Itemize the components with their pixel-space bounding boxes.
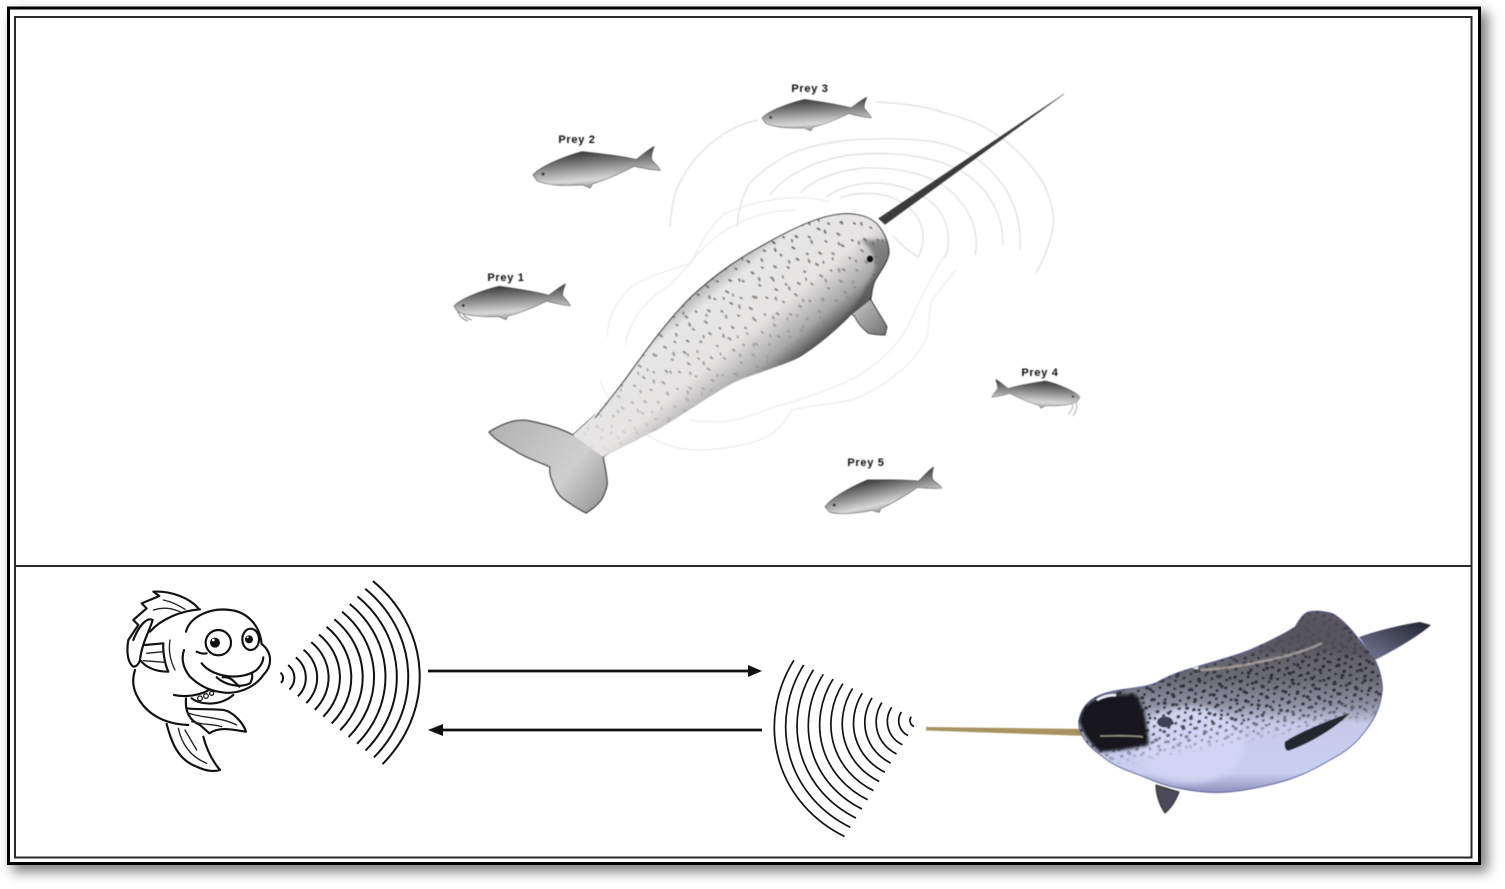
narwhal body bbox=[572, 212, 890, 458]
icon: cartoon fish bbox=[127, 592, 270, 771]
tail fluke bbox=[1359, 622, 1431, 660]
prey 1 bbox=[453, 272, 571, 322]
tusk bbox=[926, 727, 1095, 736]
panel: narwhal hunting prey bbox=[15, 17, 1472, 566]
arrow: narwhal click to fish bbox=[428, 665, 762, 677]
prey 5 bbox=[821, 457, 944, 523]
echolocation ripples bbox=[600, 102, 1053, 450]
prey 2: Prey 2 bbox=[558, 134, 596, 146]
narwhal photo bbox=[926, 600, 1431, 820]
panel: sonar exchange bbox=[15, 566, 1472, 858]
sound waves from narwhal bbox=[754, 633, 938, 848]
prey 4 bbox=[991, 367, 1081, 416]
sound waves from fish bbox=[276, 579, 424, 769]
prey 3 bbox=[761, 83, 872, 133]
flipper bbox=[1285, 713, 1350, 751]
prey 3: Prey 3 bbox=[791, 83, 829, 95]
prey 4: Prey 4 bbox=[1021, 367, 1059, 379]
lower fin bbox=[1156, 785, 1179, 813]
narwhal tusk bbox=[878, 94, 1064, 224]
narwhal flipper bbox=[851, 298, 887, 335]
prey 1: Prey 1 bbox=[487, 272, 525, 284]
arrow: echo back bbox=[428, 724, 762, 736]
prey 2 bbox=[531, 134, 661, 193]
narwhal tail flukes bbox=[489, 415, 625, 513]
prey 5: Prey 5 bbox=[847, 457, 885, 469]
body bbox=[1078, 610, 1384, 794]
